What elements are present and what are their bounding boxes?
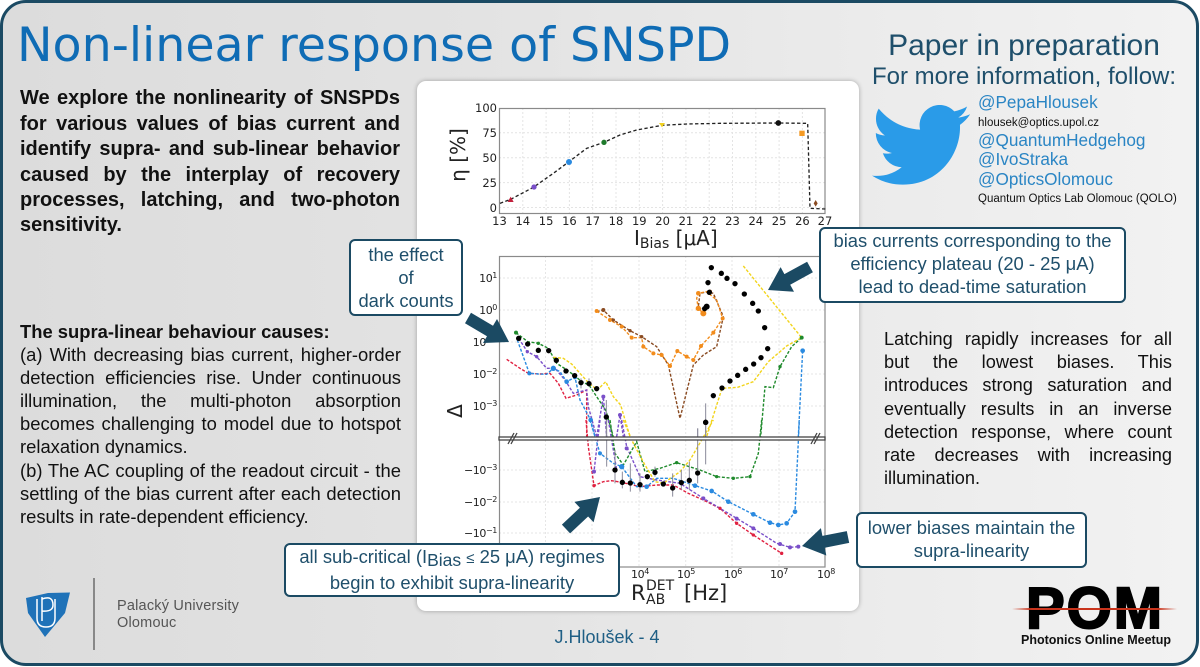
tick labels	[464, 271, 497, 540]
chart: efficiency vs bias current: 13	[492, 214, 507, 228]
latching text: but the lowest biases. This	[884, 352, 1172, 372]
chart: delta vs detection rate: [Hz]	[684, 581, 727, 605]
tick labels: 0	[492, 303, 497, 312]
laser line	[1012, 608, 1177, 610]
tick labels: 0	[490, 201, 497, 215]
callout: sub-critical regimes: all sub-critical (IBias ≤ 25 μA) regimes	[299, 546, 605, 570]
tick labels: 10	[473, 336, 486, 349]
fitted curve	[500, 123, 825, 209]
chart: efficiency vs bias current: 20	[655, 214, 670, 228]
chart: efficiency vs bias current: 27	[818, 214, 832, 228]
POM wordmark: POM	[1026, 576, 1164, 641]
latching text: introduces strong saturation and	[884, 375, 1172, 395]
axis labels: η [%]	[446, 128, 470, 182]
intro text: caused by the interplay of recovery	[20, 164, 400, 186]
chart: delta vs detection rate: 10	[631, 568, 644, 581]
tagline: Photonics Online Meetup	[1021, 633, 1171, 647]
twitter handles	[978, 92, 1177, 205]
twitter handles: Quantum Optics Lab Olomouc (QOLO)	[978, 193, 1177, 205]
chart: efficiency vs bias current	[446, 101, 832, 252]
axis break	[499, 433, 825, 444]
chart: delta vs detection rate	[443, 256, 835, 608]
twitter handles: @QuantumHedgehog	[978, 130, 1145, 150]
chart: delta vs detection rate: 10	[677, 568, 690, 581]
chart: efficiency vs bias current: 23	[725, 214, 740, 228]
chart: efficiency vs bias current: [μA]	[669, 226, 718, 250]
latching text: detection response, where count	[884, 422, 1172, 442]
tick labels: −2	[486, 495, 497, 504]
chart: efficiency vs bias current: 19	[632, 214, 647, 228]
chart: efficiency vs bias current: 18	[609, 214, 623, 228]
tick labels: 10	[479, 304, 492, 317]
tick labels: 10	[473, 368, 486, 381]
callout: efficiency plateau	[819, 227, 1126, 303]
callout: dark counts: dark counts	[358, 290, 454, 310]
latching text: illumination.	[884, 468, 980, 488]
callout: dark counts	[349, 239, 463, 316]
callout: lower biases: lower biases maintain the	[868, 517, 1075, 538]
chart: efficiency vs bias current: I	[634, 226, 640, 250]
twitter handles: @PepaHlousek	[978, 92, 1098, 112]
intro text: for various values of bias current and	[20, 113, 400, 135]
chart: efficiency vs bias current: 24	[748, 214, 763, 228]
supra-linear causes text: (a) With decreasing bias current, higher-order	[20, 344, 401, 365]
footer author: J.Hloušek - 4	[554, 627, 660, 647]
tick labels: −2	[486, 367, 497, 376]
logo: Palacky University	[26, 578, 239, 650]
callout: lower biases	[856, 512, 1087, 568]
icon: university shield	[26, 592, 70, 637]
tick labels: −1	[486, 335, 497, 344]
panel: charts	[417, 81, 859, 611]
chart: efficiency vs bias current: 21	[679, 214, 693, 228]
supra-linear causes text: illumination, the multi-photon absorption	[20, 390, 401, 411]
intro text: We explore the nonlinearity of SNSPDs	[20, 87, 400, 109]
supra-linear causes text: detection efficiencies rise. Under continuous	[20, 367, 401, 388]
twitter handles: @OpticsOlomouc	[978, 169, 1113, 189]
supra-linear causes text	[20, 321, 401, 527]
tick labels: 25	[482, 176, 497, 190]
callout: efficiency plateau: bias currents corresponding to the	[833, 230, 1112, 251]
chart: efficiency vs bias current: 25	[772, 214, 786, 228]
chart: delta vs detection rate: R	[631, 581, 646, 605]
lower series	[586, 420, 799, 553]
lower series markers	[592, 420, 800, 555]
callout: efficiency plateau: lead to dead-time saturation	[858, 276, 1086, 297]
chart: efficiency vs bias current: 22	[702, 214, 717, 228]
tick labels: 10	[473, 400, 486, 413]
university name: Palacký University	[117, 598, 239, 614]
tick labels: −3	[486, 399, 497, 408]
axis labels: Δ	[443, 404, 467, 418]
paper in preparation heading: Paper in preparation	[888, 29, 1160, 62]
chart: delta vs detection rate: 6	[737, 567, 742, 576]
tick labels: −10	[464, 496, 486, 509]
chart: delta vs detection rate: AB	[646, 592, 665, 608]
tick labels: −1	[486, 526, 497, 535]
icon: twitter bird	[872, 105, 970, 185]
university name	[117, 598, 239, 630]
tick labels: −3	[486, 463, 497, 472]
callout: sub-critical regimes	[284, 543, 620, 597]
callout: dark counts: of	[398, 266, 414, 288]
tick labels: −10	[464, 527, 486, 540]
upper series markers	[514, 265, 805, 437]
latching text: rate decreases with increasing	[884, 445, 1172, 465]
supra-linear causes text: settling of the bias current after each detection	[20, 483, 401, 504]
callout: lower biases: supra-linearity	[914, 540, 1029, 561]
supra-linear causes text: becomes challenging to model due to hotspot	[20, 413, 401, 434]
chart: delta vs detection rate: 8	[830, 567, 835, 576]
tick labels: 75	[482, 126, 497, 140]
twitter handles: hlousek@optics.upol.cz	[978, 117, 1099, 129]
latching text: eventually results in an inverse	[884, 399, 1172, 419]
supra-linear causes text: (b) The AC coupling of the readout circuit - the	[20, 460, 401, 481]
upper series	[507, 266, 803, 437]
tick labels: 1	[492, 271, 497, 280]
intro text: processes, latching, and two-photon	[20, 189, 400, 211]
logo: Photonics Online Meetup	[1013, 576, 1176, 647]
intro text: sensitivity.	[20, 214, 122, 236]
title: Non-linear response of SNSPD	[17, 18, 731, 73]
callout: dark counts: the effect	[368, 244, 444, 264]
arrow: dark counts	[465, 313, 509, 343]
tick labels: 50	[482, 151, 497, 165]
chart: efficiency vs bias current: 17	[585, 214, 600, 228]
chart: efficiency vs bias current: Bias	[640, 236, 669, 252]
intro text	[20, 87, 400, 236]
intro text: identify supra- and sub-linear behavior	[20, 138, 400, 160]
chart: delta vs detection rate: 10	[724, 568, 737, 581]
arrow: dead-time saturation	[768, 262, 813, 292]
callout: efficiency plateau: efficiency plateau (20 - 25 μA)	[850, 253, 1095, 274]
follow heading: For more information, follow:	[872, 63, 1176, 90]
supra-linear causes text: results in rate-dependent efficiency.	[20, 506, 309, 527]
divider	[93, 578, 94, 650]
chart: delta vs detection rate: 10	[817, 568, 830, 581]
latching text: Latching rapidly increases for all	[884, 329, 1172, 349]
university name: Olomouc	[117, 614, 176, 630]
latching text	[884, 329, 1172, 488]
data points	[508, 120, 818, 207]
supra-linear causes text: The supra-linear behaviour causes:	[20, 321, 330, 342]
callout: sub-critical regimes: begin to exhibit supra-linearity	[330, 572, 574, 593]
chart: efficiency vs bias current: 15	[539, 214, 553, 228]
tick labels: 100	[475, 101, 497, 115]
chart: delta vs detection rate: 10	[770, 568, 783, 581]
tick labels	[475, 101, 497, 215]
tick labels: −10	[464, 464, 486, 477]
supra-linear causes text: relaxation dynamics.	[20, 436, 188, 457]
arrow: lower biases	[802, 528, 849, 556]
chart: delta vs detection rate: 7	[783, 567, 788, 576]
chart: delta vs detection rate: DET	[646, 578, 675, 594]
arrow: supra-linearity onset	[562, 497, 600, 533]
chart: efficiency vs bias current: 14	[515, 214, 530, 228]
twitter handles: @IvoStraka	[978, 149, 1068, 169]
chart: efficiency vs bias current: 26	[795, 214, 810, 228]
chart: efficiency vs bias current: 16	[562, 214, 577, 228]
chart: delta vs detection rate: 4	[644, 567, 649, 576]
tick labels: 10	[479, 272, 492, 285]
chart: delta vs detection rate: 5	[690, 567, 695, 576]
